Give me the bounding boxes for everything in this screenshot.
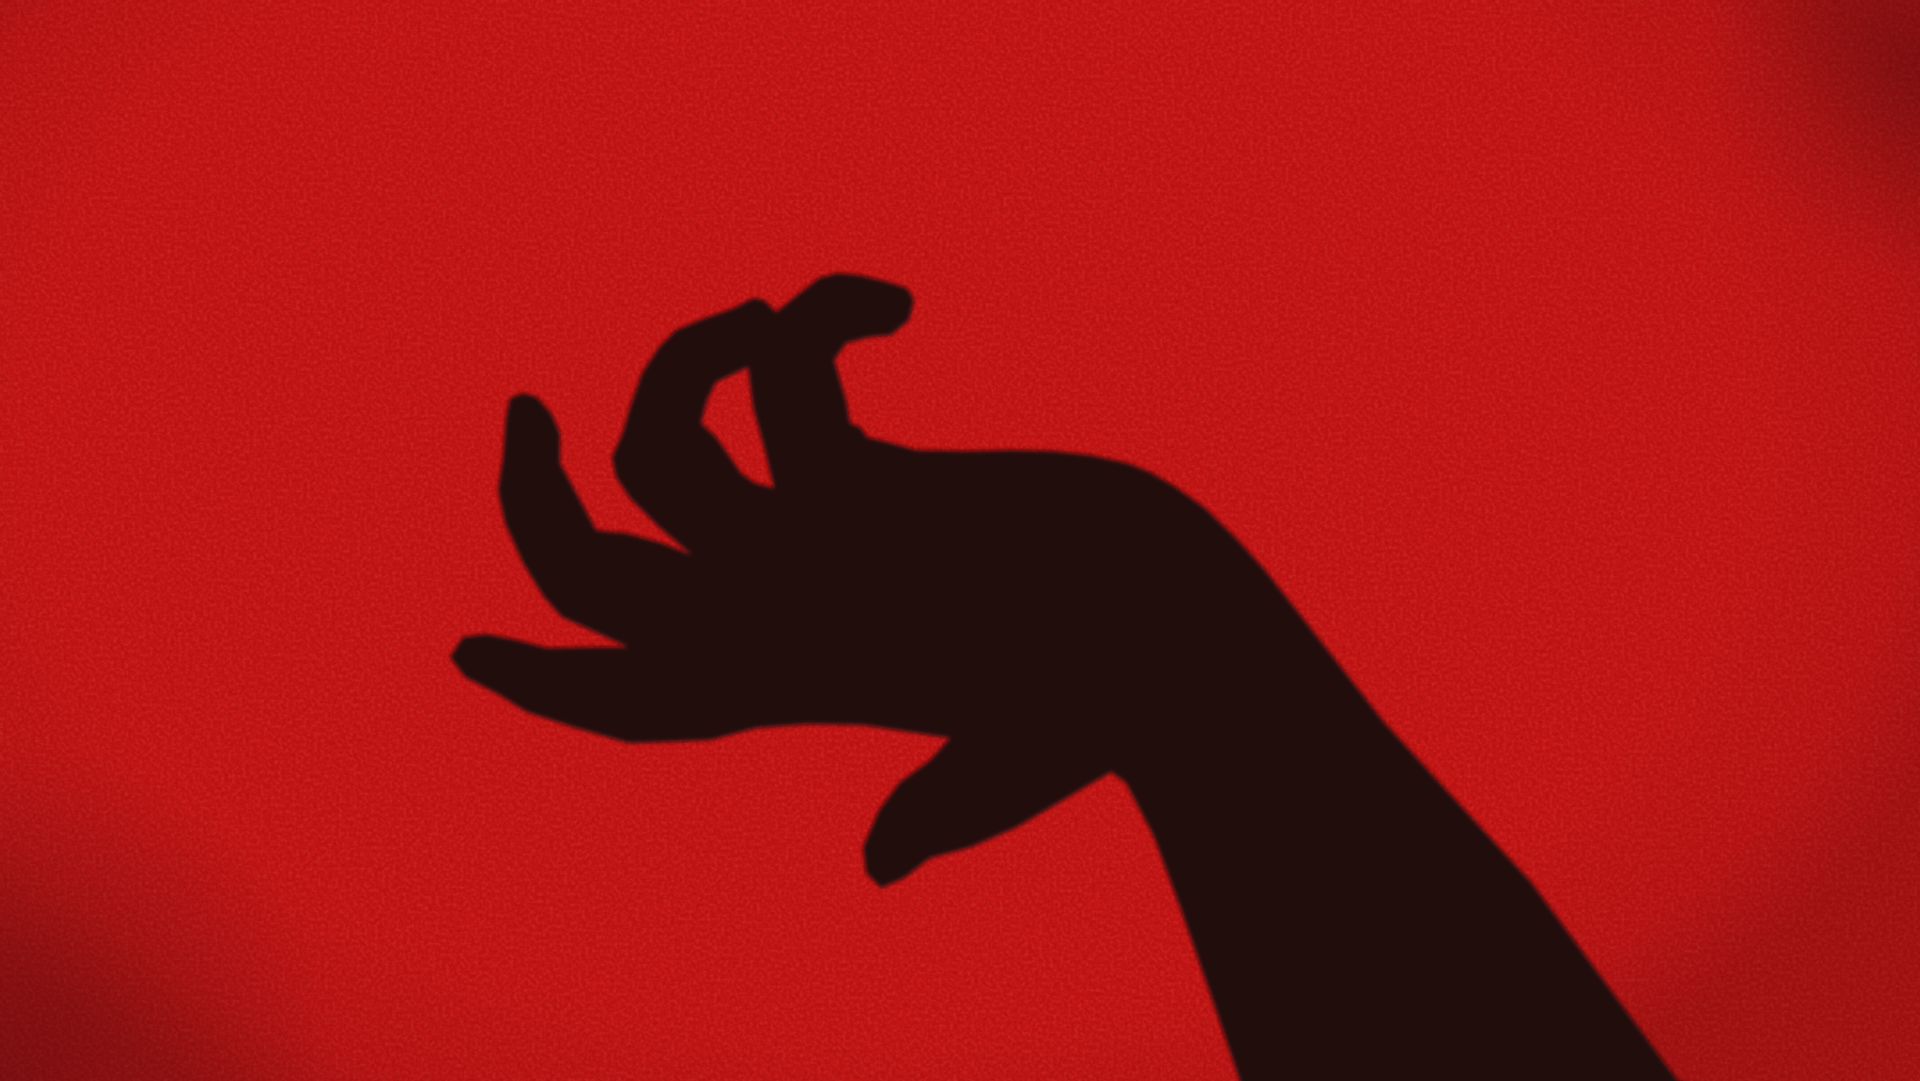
silhouette: hand and forearm: [450, 273, 1720, 1081]
